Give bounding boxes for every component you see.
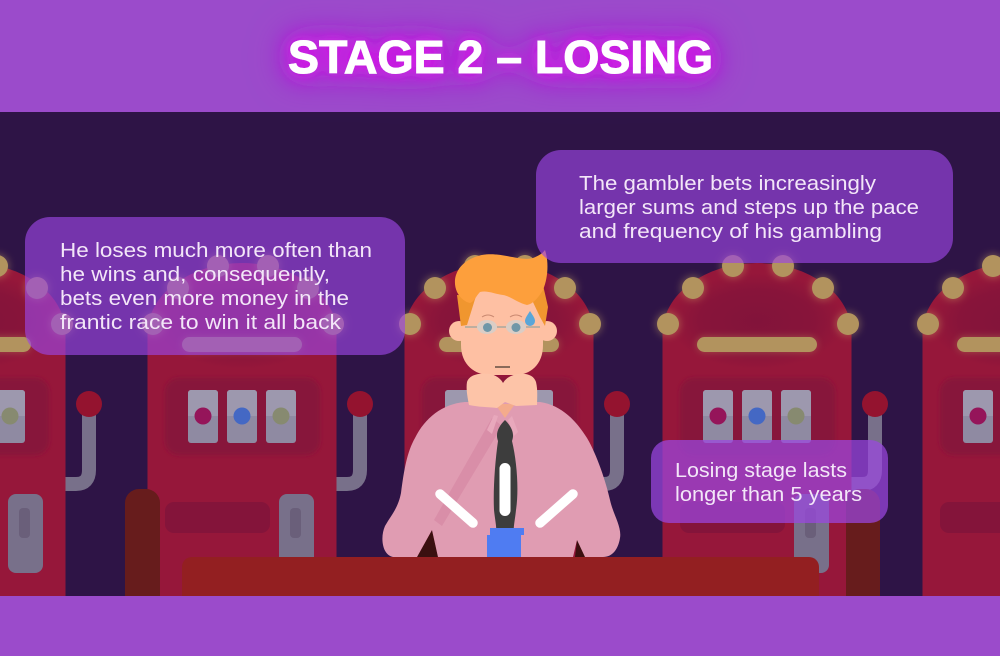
callout: left: He loses much more often than xyxy=(60,240,372,262)
shadow gaps between arms and torso xyxy=(417,530,588,557)
blue pen xyxy=(487,528,524,557)
shirt highlight strokes xyxy=(440,494,573,523)
person xyxy=(382,250,620,557)
slot machine 3 xyxy=(398,254,630,596)
glasses xyxy=(465,320,540,334)
ears xyxy=(449,321,469,341)
mouth xyxy=(495,366,510,368)
callout: duration: Losing stage lasts xyxy=(675,460,847,482)
right chair pillar xyxy=(846,489,880,596)
eyebrows xyxy=(482,315,522,317)
slot machine 5 xyxy=(916,254,1000,596)
background xyxy=(0,112,1000,596)
face xyxy=(461,285,543,375)
callout: right: larger sums and steps up the pace xyxy=(579,197,919,219)
hair xyxy=(455,250,548,326)
callout: duration: longer than 5 years xyxy=(675,484,862,506)
neck xyxy=(495,404,515,418)
sash xyxy=(434,418,502,526)
callout: right: and frequency of his gambling xyxy=(579,221,882,243)
callout: right xyxy=(536,150,953,263)
tie xyxy=(494,420,517,533)
hands xyxy=(467,374,537,408)
collar xyxy=(487,415,518,436)
desk xyxy=(182,557,819,596)
callout: left: bets even more money in the xyxy=(60,288,349,310)
footer band xyxy=(0,596,1000,656)
title: STAGE 2 – LOSING xyxy=(288,31,713,83)
shirt xyxy=(382,402,620,557)
callout: duration xyxy=(651,440,888,523)
callout: right: The gambler bets increasingly xyxy=(579,173,876,195)
callout: left: frantic race to win it all back xyxy=(60,312,342,334)
slot machine 2 xyxy=(141,254,373,596)
callout: left: he wins and, consequently, xyxy=(60,264,330,286)
header band xyxy=(0,0,1000,112)
slot machine 1 xyxy=(0,254,102,596)
left chair pillar xyxy=(125,489,160,596)
tie highlight xyxy=(500,463,510,516)
sweat drop xyxy=(525,311,535,326)
slot machine 4 xyxy=(656,254,888,596)
callout: left xyxy=(25,217,405,355)
